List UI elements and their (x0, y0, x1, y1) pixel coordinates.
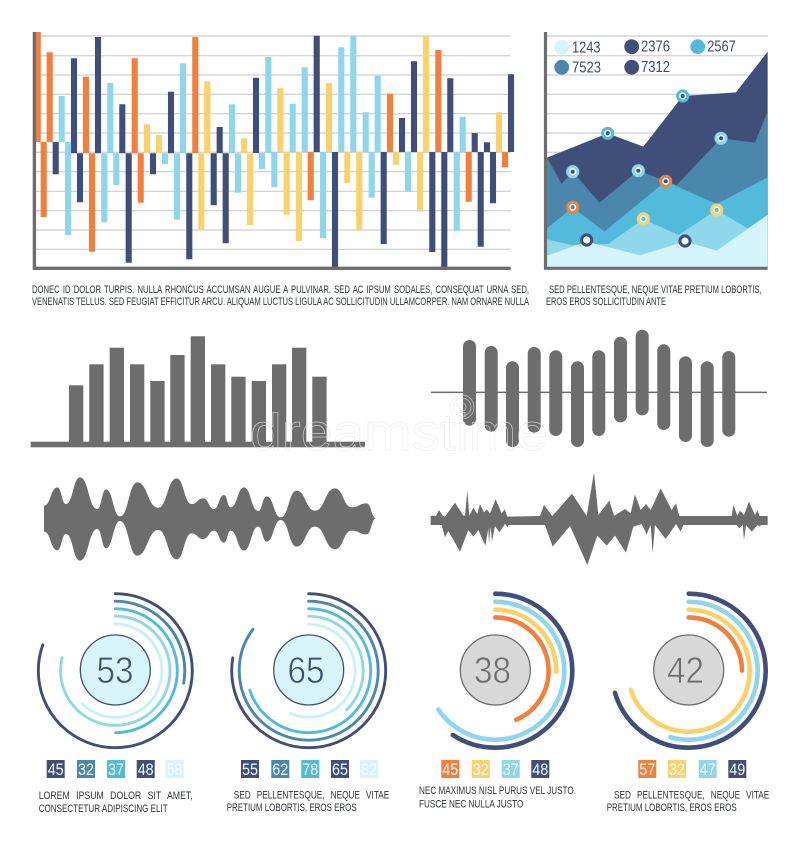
panel: layered area chart (546, 32, 768, 268)
text block: area chart caption (546, 284, 762, 308)
text block: gauge 42 caption (607, 789, 769, 814)
value tags: gauge 53: 45 (48, 761, 64, 779)
value tags: gauge 42: 57 (639, 761, 655, 779)
panel: diverging bar chart (34, 32, 511, 268)
gauge: 53: 53 (96, 650, 134, 691)
marker centres (571, 94, 723, 221)
bars: light blue (62, 36, 463, 238)
legend: 2567 (707, 39, 736, 56)
value tags: gauge 65: 78 (302, 761, 318, 779)
text block: gauge 65 caption: SED PELLENTESQUE, NEQUE VITAE (234, 789, 389, 801)
data markers (568, 91, 726, 246)
value tags: gauge 38: 48 (532, 761, 548, 779)
bars: orange (38, 32, 505, 252)
axes (34, 32, 511, 268)
value tags: gauge 38: 37 (503, 761, 519, 779)
value tags: gauge 53: 58 (167, 761, 183, 779)
text block: gauge 38 caption (419, 785, 576, 810)
text block: gauge 65 caption (227, 789, 389, 814)
area layers (547, 52, 768, 267)
chart: grey column bars (31, 336, 365, 447)
value tags: gauge 65 (241, 760, 378, 779)
gauge: 42 (612, 594, 766, 748)
legend (554, 39, 736, 77)
bars: yellow (147, 36, 499, 241)
chart: smooth sound wave (44, 477, 376, 561)
value tags: gauge 53: 48 (138, 761, 154, 779)
gauge: 38 (418, 594, 572, 748)
watermark: dreamstime (250, 404, 548, 462)
value tags: gauge 38 (441, 760, 549, 779)
value tags: gauge 42: 32 (669, 761, 685, 779)
value tags: gauge 42: 47 (700, 761, 716, 779)
legend: 2376 (641, 39, 670, 56)
bars: navy (56, 36, 511, 267)
axes (546, 32, 768, 268)
value tags: gauge 38: 32 (473, 761, 489, 779)
legend: 1243 (572, 39, 600, 56)
gauge: 38: 38 (474, 650, 511, 691)
value tags: gauge 65: 55 (242, 761, 258, 779)
chart: jagged sound wave (431, 472, 768, 565)
gauge: 42: 42 (667, 650, 704, 691)
legend: 7523 (572, 60, 601, 77)
value tags: gauge 42: 49 (729, 761, 745, 779)
chart: rounded pill bars on a line (431, 330, 767, 447)
value tags: gauge 53: 32 (78, 761, 94, 779)
gauge: 65 (232, 594, 386, 748)
text block: gauge 38 caption: NEC MAXIMUS NISL PURUS VEL JUSTO. (419, 785, 576, 797)
text block: area chart caption: EROS EROS SOLLICITUDIN ANTE (546, 296, 666, 308)
text block: bar chart caption: VENENATIS TELLUS. SED FEUGIAT EFFICITUR ARCU. ALIQUAM LUCTUS LIGULA AC SOLLICITUDIN ULLAMCORPER. NAM ORNARE NULLA (32, 296, 529, 308)
value tags: gauge 65: 62 (272, 761, 288, 779)
value tags: gauge 65: 82 (361, 761, 377, 779)
text block: gauge 53 caption (39, 790, 193, 815)
value tags: gauge 38: 45 (442, 761, 458, 779)
legend: 7312 (641, 59, 670, 76)
text block: bar chart caption: DONEC ID DOLOR TURPIS. NULLA RHONCUS ACCUMSAN AUGUE A PULVINAR. SED AC IPSUM SODALES, CONSEQUAT URNA SED, (32, 284, 529, 296)
text block: gauge 53 caption: CONSECTETUR ADIPISCING ELIT (39, 803, 168, 815)
gauge: 53 (38, 594, 192, 748)
value tags: gauge 42 (638, 760, 746, 779)
value tags: gauge 65: 65 (332, 761, 348, 779)
text block: gauge 65 caption: PRETIUM LOBORTIS, EROS EROS (227, 802, 357, 814)
gauge: 65: 65 (288, 650, 324, 691)
text block: gauge 53 caption: LOREM IPSUM DOLOR SIT AMET, (39, 790, 193, 802)
text block: gauge 42 caption: PRETIUM LOBORTIS, EROS EROS (607, 802, 737, 814)
text block: bar chart caption (32, 284, 529, 308)
text block: gauge 38 caption: FUSCE NEC NULLA JUSTO (419, 798, 524, 810)
value tags: gauge 53 (47, 760, 184, 779)
value tags: gauge 53: 37 (108, 761, 124, 779)
